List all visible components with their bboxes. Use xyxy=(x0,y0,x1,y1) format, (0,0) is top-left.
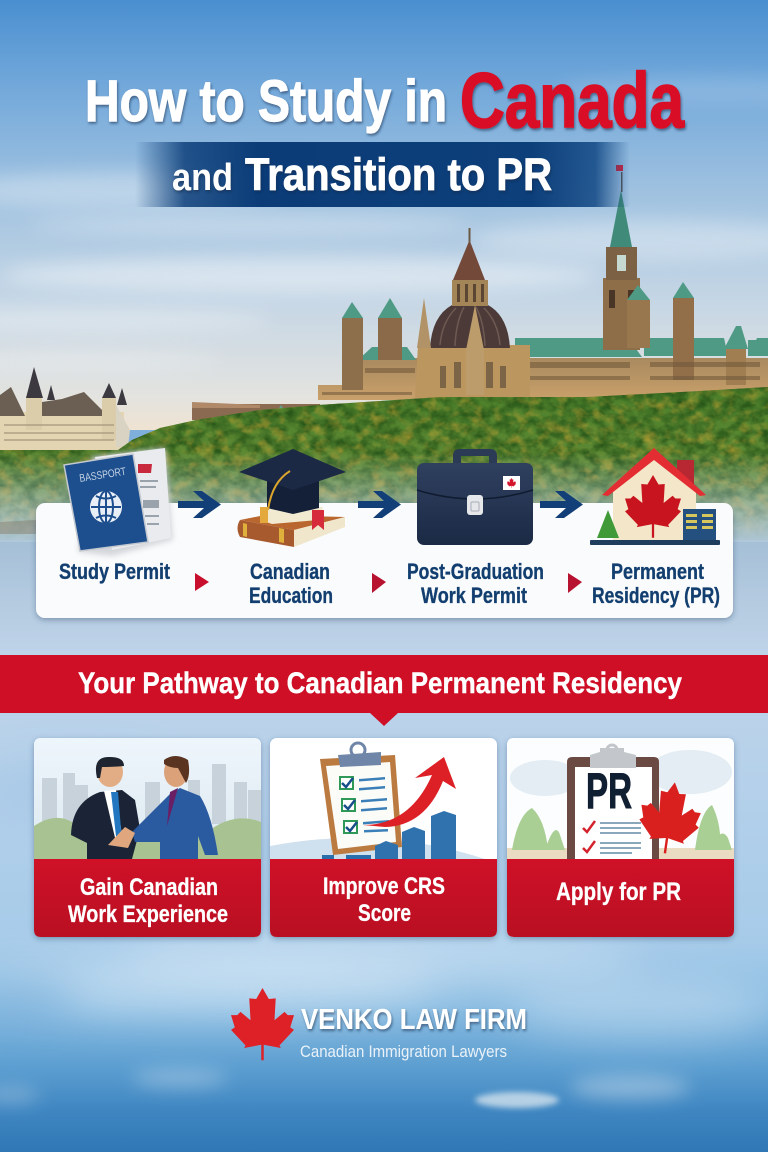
red caption: improve score xyxy=(270,859,497,937)
panel: apply for PR xyxy=(507,738,734,937)
west turrets xyxy=(342,298,402,390)
label: Post-Graduation Work Permit xyxy=(407,559,544,608)
firm name: VENKO LAW FIRM xyxy=(301,1004,527,1036)
icon: passport xyxy=(64,448,173,556)
hotel at left xyxy=(0,367,130,450)
subtitle band xyxy=(135,142,630,207)
label: Permanent Residency (PR): Residency (PR) xyxy=(592,583,720,608)
label: Permanent Residency (PR): Permanent xyxy=(611,559,705,584)
peace tower xyxy=(603,165,640,350)
forested hill xyxy=(0,387,768,542)
illustration: checklist and rising chart xyxy=(270,743,485,859)
icon: graduation cap and books xyxy=(238,449,346,547)
red caption: improve score: Score xyxy=(358,900,411,927)
red caption: improve score: Improve CRS xyxy=(323,873,445,900)
panel: improve CRS score xyxy=(270,738,497,937)
red caption: apply xyxy=(507,859,734,937)
firm tagline: Canadian Immigration Lawyers xyxy=(300,1042,507,1061)
east towers xyxy=(627,282,768,385)
label: Canadian Education: Canadian xyxy=(250,559,330,584)
main stone block xyxy=(318,358,768,400)
parliament building xyxy=(318,165,768,400)
label: Post-Graduation Work Permit: Work Permit xyxy=(421,583,528,608)
chevron 3 xyxy=(568,573,582,593)
icon: briefcase xyxy=(417,449,533,545)
title line 1: How to Study in xyxy=(85,69,447,134)
subtitle text: Transition to PR xyxy=(245,149,552,200)
label: Canadian Education: Education xyxy=(249,583,333,608)
label: Permanent Residency (PR) xyxy=(592,559,720,608)
illustration: PR clipboard and maple leaf: PR xyxy=(586,763,632,819)
illustration: handshake xyxy=(34,738,261,859)
title highlight: Canada: Canada xyxy=(460,56,684,144)
red caption: apply: Apply for PR xyxy=(556,878,681,906)
red banner xyxy=(0,655,768,726)
red caption: gain experience xyxy=(34,859,261,937)
background: sky xyxy=(0,0,768,430)
subtitle text: and xyxy=(172,157,233,199)
illustration: PR clipboard and maple leaf xyxy=(507,738,734,859)
logo xyxy=(231,988,527,1061)
arrow 1 xyxy=(178,491,221,518)
icon: maple leaf xyxy=(231,988,294,1060)
red caption: gain experience: Gain Canadian xyxy=(80,874,218,901)
panel: gain Canadian work experience xyxy=(34,738,261,937)
arrow 3 xyxy=(540,491,583,518)
white card xyxy=(36,503,733,618)
label: Post-Graduation Work Permit: Post-Graduation xyxy=(407,559,544,584)
library xyxy=(415,228,530,398)
arrow 2 xyxy=(358,491,401,518)
low riverside building xyxy=(192,402,320,420)
chevron 2 xyxy=(372,573,386,593)
banner heading: Your Pathway to Canadian Permanent Residency xyxy=(78,667,682,700)
icon: house with maple leaf xyxy=(590,448,720,545)
icon: passport: BASSPORT xyxy=(79,466,127,485)
background: water and mist xyxy=(0,535,768,1152)
label: Study Permit: Study Permit xyxy=(59,559,171,584)
window rows xyxy=(322,362,760,395)
chevron 1 xyxy=(195,573,209,591)
copper roofs xyxy=(358,338,768,360)
panel: four step pathway xyxy=(36,448,733,618)
title xyxy=(85,56,684,144)
label: Canadian Education xyxy=(249,559,333,608)
red caption: gain experience: Work Experience xyxy=(68,901,228,928)
